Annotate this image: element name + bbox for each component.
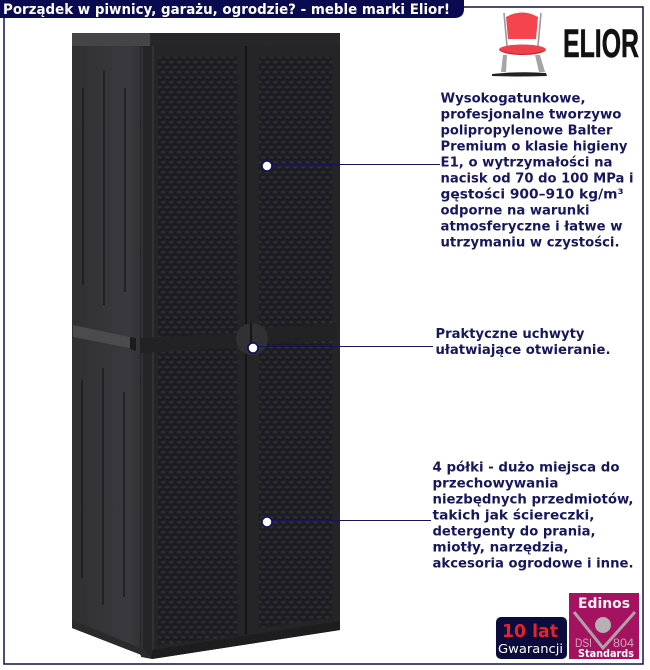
cabinet side face <box>72 45 152 659</box>
icon: red chair <box>492 12 547 76</box>
cabinet front frame <box>140 45 340 659</box>
text block: shelves <box>432 460 634 572</box>
door panels with weave <box>158 57 332 645</box>
text block: shelves: akcesoria ogrodowe i inne. <box>432 556 634 572</box>
text block: shelves: miotły, narzędzia, <box>432 540 568 556</box>
badge: 10 year warranty: 10 lat <box>502 621 558 642</box>
badge: Edinos standards: DSI <box>575 636 592 650</box>
text block: material: odporne na warunki <box>440 202 590 218</box>
text block: material: atmosferyczne i łatwe w <box>440 218 622 234</box>
text block: shelves: takich jak ściereczki, <box>432 508 594 524</box>
text block: material: polipropylenowe Balter <box>440 122 613 138</box>
badge: 10 year warranty <box>496 617 567 659</box>
text block: material: nacisk od 70 do 100 MPa i <box>440 170 634 186</box>
text block: handles: ułatwiające otwieranie. <box>436 342 610 358</box>
handle bands <box>140 333 237 353</box>
text block: handles: Praktyczne uchwyty <box>436 326 585 342</box>
marker: shelves <box>261 516 431 528</box>
header banner: Porządek w piwnicy, garażu, ogrodzie? - meble marki Elior! <box>3 2 450 18</box>
text block: material: Premium o klasie higieny <box>440 138 628 154</box>
badge: Edinos standards <box>569 593 639 660</box>
badge: 10 year warranty: Gwarancji <box>498 642 563 656</box>
text block: material: E1, o wytrzymałości na <box>440 154 612 170</box>
text block: shelves: detergenty do prania, <box>432 524 596 540</box>
side grooves <box>82 70 125 605</box>
text block: shelves: przechowywania <box>432 476 558 492</box>
text block: shelves: niezbędnych przedmiotów, <box>432 492 634 508</box>
base edge <box>152 621 340 659</box>
text block: shelves: 4 półki - dużo miejsca do <box>432 460 620 476</box>
cabinet product image <box>72 33 340 659</box>
door gap <box>245 46 247 634</box>
text block: material: Wysokogatunkowe, <box>440 90 586 106</box>
handle <box>236 323 268 355</box>
marker: material <box>261 160 440 172</box>
badge: Edinos standards: Standards <box>578 648 634 660</box>
frame highlights <box>142 46 153 654</box>
text block: material: gęstości 900–910 kg/m³ <box>440 186 624 202</box>
badge: Edinos standards: 804 <box>613 636 634 650</box>
marker: handles <box>247 342 433 354</box>
text block: handles <box>436 326 610 358</box>
badge: Edinos standards: Edinos <box>578 596 630 612</box>
side band <box>73 325 130 348</box>
text block: material: utrzymaniu w czystości. <box>440 234 620 250</box>
cabinet top <box>72 33 340 46</box>
text block: material <box>440 90 634 250</box>
text block: material: profesjonalne tworzywo <box>440 106 622 122</box>
